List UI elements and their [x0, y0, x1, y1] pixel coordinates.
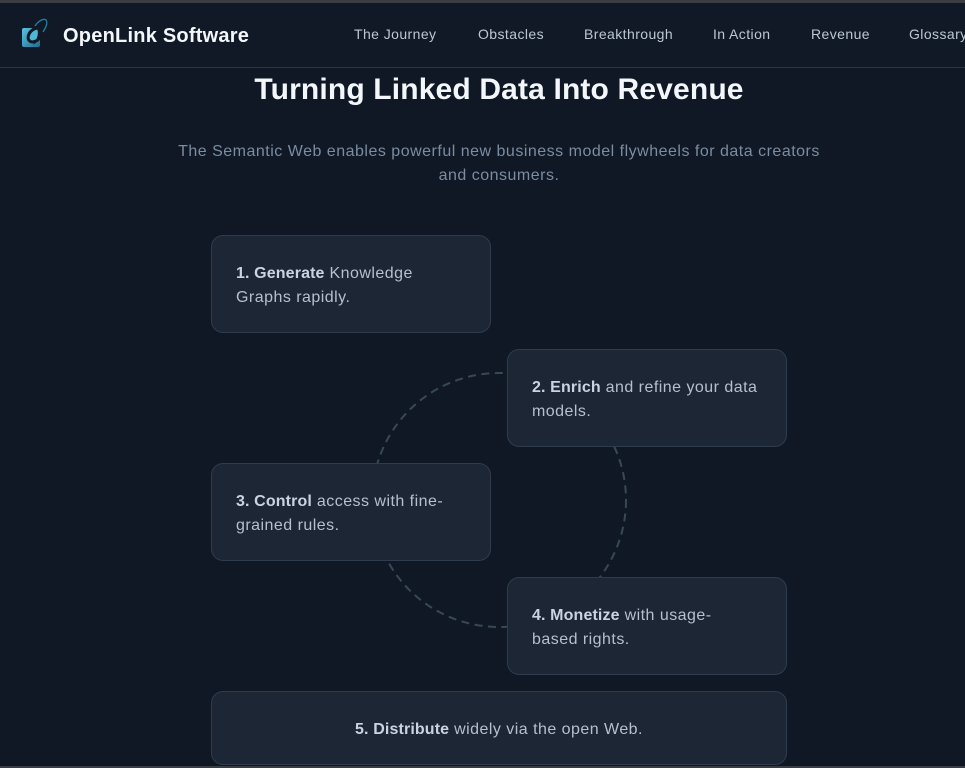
- card 5: Distribute: [211, 691, 787, 765]
- card 1: Generate: [211, 235, 491, 333]
- bottom window edge: [0, 766, 965, 768]
- brand name: OpenLink Software: [63, 25, 249, 47]
- card 2: Enrich: [507, 349, 787, 447]
- subtitle: The Semantic Web enables powerful new business model flywheels for data creators: [178, 143, 820, 160]
- icon: OpenLink logo: [22, 18, 48, 47]
- nav: Revenue: Revenue: [811, 26, 870, 42]
- nav: Breakthrough: Breakthrough: [584, 26, 673, 42]
- nav: Obstacles: Obstacles: [478, 26, 544, 42]
- dashed flywheel circle: [376, 372, 627, 628]
- card 2: Enrich: 2. Enrich and refine your data: [532, 379, 757, 396]
- title: Turning Linked Data Into Revenue: [254, 73, 744, 106]
- card 4: Monetize: 4. Monetize with usage-: [532, 607, 712, 624]
- nav: The Journey: The Journey: [354, 26, 436, 42]
- card 3: Control: grained rules.: [236, 517, 340, 534]
- card 1: Generate: 1. Generate Knowledge: [236, 265, 413, 282]
- subtitle: and consumers.: [439, 167, 559, 184]
- nav: In Action: In Action: [713, 26, 770, 42]
- card 3: Control: 3. Control access with fine-: [236, 493, 443, 510]
- header bar: [0, 3, 965, 68]
- subtitle: [178, 143, 820, 184]
- top window edge: [0, 0, 965, 3]
- card 5: Distribute: 5. Distribute widely via the open Web.: [355, 721, 643, 738]
- card 1: Generate: Graphs rapidly.: [236, 289, 350, 306]
- card 2: Enrich: models.: [532, 403, 591, 420]
- card 3: Control: [211, 463, 491, 561]
- card 4: Monetize: based rights.: [532, 631, 630, 648]
- card 4: Monetize: [507, 577, 787, 675]
